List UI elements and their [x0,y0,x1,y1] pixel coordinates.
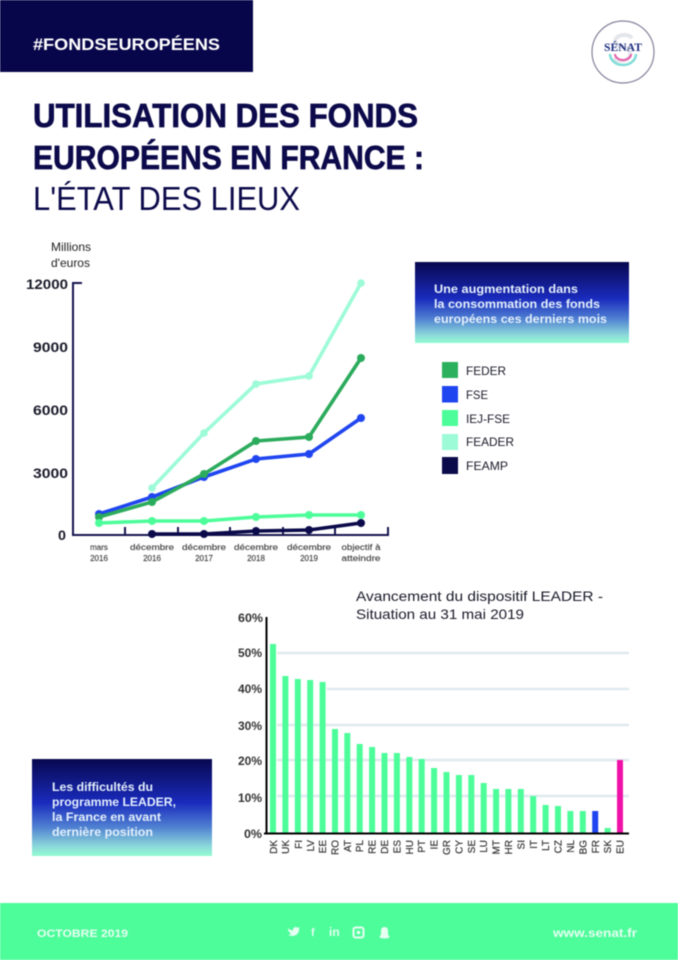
y-axis labels: 40% [238,684,262,696]
legend: IEJ-FSE [466,412,510,426]
country labels: LV [306,840,317,852]
country labels: GR [442,840,453,855]
x-axis labels: 2019 [300,554,318,563]
country labels: LU [479,840,490,853]
icon: linkedin: in [329,925,340,939]
bars [270,644,611,833]
country labels: FR [591,840,602,853]
y-axis unit label: Millions [51,240,91,254]
country labels: PT [417,840,428,853]
y-axis labels: 0% [244,829,262,841]
x-axis labels: mars [90,543,108,552]
grid lines [277,653,629,796]
bar chart heading: Situation au 31 mai 2019 [356,606,524,622]
country labels: ES [392,840,404,853]
y-axis labels [238,613,263,841]
line chart: fund consumption [26,240,388,563]
header banner: hashtag: #FONDSEUROPÉENS [33,35,220,54]
bar: EU average [617,760,623,833]
logo: Sénat: SÉNAT [604,40,642,54]
title [33,97,424,217]
country labels: LT [541,840,552,851]
x-axis labels: décembre [287,543,332,552]
country labels: NL [566,840,577,853]
x-axis labels: 2016 [143,554,161,563]
country labels: HR [504,840,515,854]
bar chart: LEADER progress [238,613,629,855]
country labels: EU [616,840,626,854]
legend: FEAMP [466,459,508,473]
y-axis labels: 50% [238,648,262,660]
y-axis labels: 3000 [33,465,68,481]
legend: FSE [466,388,488,402]
callout: increase in consumption: européens ces derniers mois [434,312,607,326]
x-axis labels: objectif à [342,543,381,552]
country labels: CY [454,840,466,854]
country labels: SK [603,840,614,853]
country labels: FI [294,840,305,849]
country labels: CZ [554,840,564,853]
series: FEADER [148,279,365,492]
country labels: DK [269,840,280,854]
x-axis labels: 2018 [247,554,265,563]
legend: FEADER [466,435,514,449]
y-axis unit label: d'euros [51,256,90,270]
country labels: BG [578,840,590,854]
footer band [0,903,678,960]
y-axis labels: 20% [238,756,262,768]
country labels: MT [492,840,502,854]
footer date: OCTOBRE 2019 [37,928,128,940]
country labels: IT [529,840,540,849]
y-axis labels: 60% [238,613,263,625]
x-axis labels: atteindre [342,554,381,563]
callout: LEADER difficulties: Les difficultés du [52,780,153,794]
y-axis labels: 6000 [33,402,68,418]
y-axis labels: 30% [238,721,262,733]
country labels: UK [281,840,292,854]
country labels: DE [380,840,391,854]
x-axis labels [90,543,381,563]
country labels [269,840,626,855]
country labels: AT [343,840,354,852]
icon: facebook: f [311,927,315,939]
callout: LEADER difficulties: la France en avant [52,810,161,824]
icon: instagram [354,928,364,938]
x-axis labels: décembre [182,543,227,552]
logo: Sénat [592,21,654,83]
country labels: PL [355,840,366,852]
callout: LEADER difficulties: dernière position [52,825,153,839]
y-axis labels: 12000 [26,276,68,292]
legend: FEDER [466,364,506,378]
bar: France highlighted [592,811,598,833]
axes [264,617,629,834]
series: FEDER [95,354,365,521]
x-axis labels: décembre [234,543,279,552]
callout: LEADER difficulties [32,759,212,856]
country labels: RE [368,840,378,854]
callout: increase in consumption [415,262,629,343]
callout: LEADER difficulties: programme LEADER, [52,795,176,809]
x-axis labels: 2017 [195,554,213,563]
country labels: HU [405,840,416,854]
title: L'ÉTAT DES LIEUX [33,180,300,217]
title: EUROPÉENS EN FRANCE : [33,139,424,176]
footer url: www.senat.fr [552,928,638,940]
series: IEJ-FSE [95,511,365,527]
y-axis labels [26,276,68,543]
country labels: IE [430,840,440,849]
series: FEAMP [148,519,365,538]
header banner: hashtag [0,0,253,72]
y-axis labels: 10% [238,793,262,805]
y-axis labels: 0 [58,527,66,543]
axes [73,283,388,535]
legend [442,362,514,474]
icon: snapchat [379,927,390,938]
country labels: RO [330,840,342,855]
bar chart heading [356,588,603,622]
x-axis labels: décembre [130,543,175,552]
country labels: SI [516,840,528,849]
callout: increase in consumption: Une augmentation dans [434,282,578,296]
country labels: EE [318,840,329,853]
series: FSE [95,414,365,518]
callout: increase in consumption: la consommation des fonds [434,297,600,311]
x-axis labels: 2016 [90,554,108,563]
icon: twitter [288,927,300,936]
title: UTILISATION DES FONDS [33,97,418,134]
bar chart heading: Avancement du dispositif LEADER - [356,588,603,604]
y-axis labels: 9000 [33,339,68,355]
country labels: SE [467,840,478,853]
